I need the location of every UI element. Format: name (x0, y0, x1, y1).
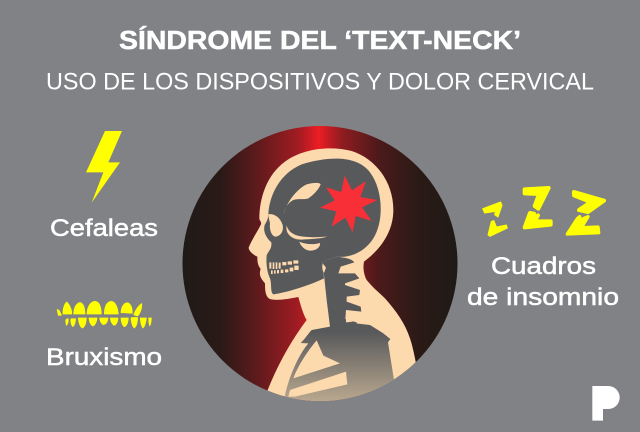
skull (264, 159, 381, 294)
body silhouette (249, 148, 418, 415)
icon: teeth (57, 301, 152, 328)
label: Bruxismo: Bruxismo (46, 344, 162, 371)
icon: lightning bolt (86, 131, 122, 203)
label: Cuadros de insomnio (467, 253, 619, 311)
figure (249, 148, 418, 415)
neck sliver (322, 263, 326, 273)
shoulder and torso bones (285, 322, 394, 405)
cervical spine (323, 257, 361, 332)
title: SÍNDROME DEL ‘TEXT-NECK’ (119, 25, 521, 55)
central illustration: skeleton profile in circle (182, 126, 458, 415)
teeth (269, 260, 299, 274)
circle background (182, 126, 458, 402)
icon: sleep Z letters (483, 188, 604, 236)
subtitle: USO DE LOS DISPOSITIVOS Y DOLOR CERVICAL (46, 68, 594, 96)
starburst pain marker (320, 176, 377, 232)
label: Cefaleas: Cefaleas (50, 215, 158, 242)
skull face details (268, 183, 327, 274)
label: Cuadros de insomnio: de insomnio (467, 284, 619, 311)
icon: P logo (592, 386, 620, 421)
label: Cuadros de insomnio: Cuadros (491, 253, 596, 280)
rib gaps (288, 318, 353, 397)
